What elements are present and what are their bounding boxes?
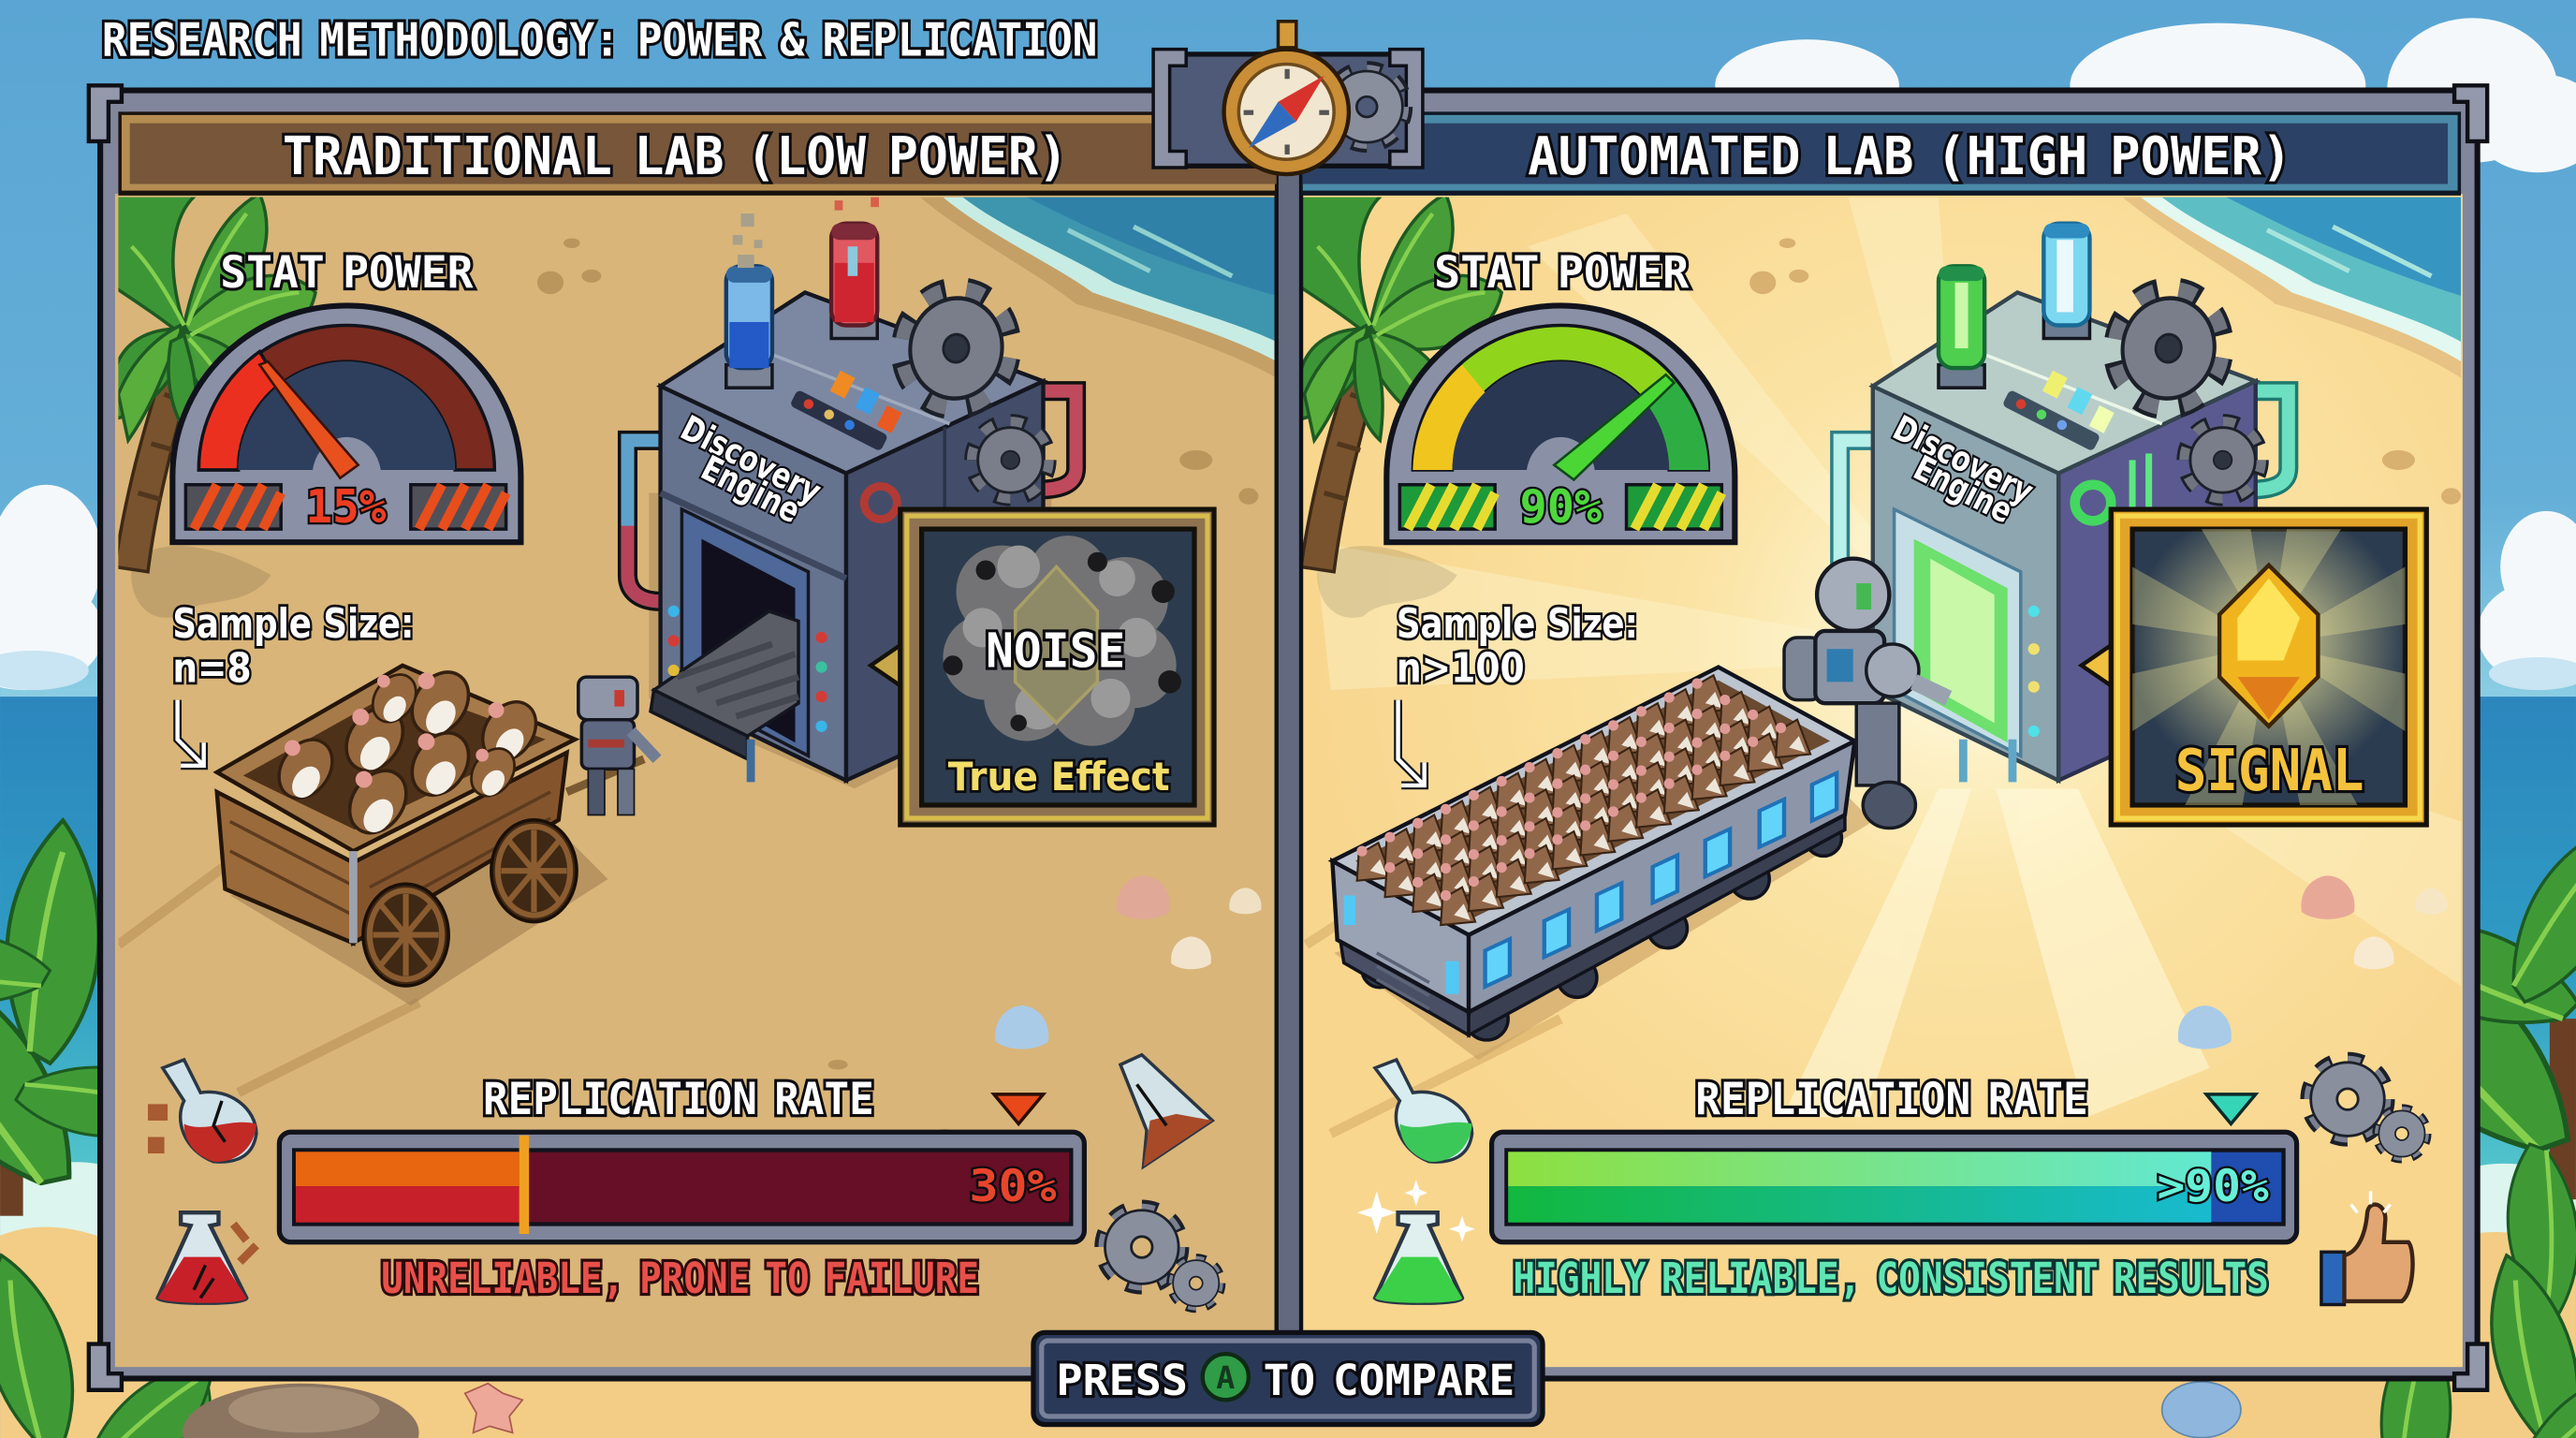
icon: A button xyxy=(1203,1354,1249,1400)
header bar: automated lab xyxy=(1301,111,2461,196)
sample size: automated: n>100 xyxy=(1397,644,1525,692)
icon: gears xyxy=(1107,1213,1218,1304)
rays and gem xyxy=(2132,529,2405,805)
caption: HIGHLY RELIABLE, CONSISTENT RESULTS xyxy=(1513,1254,2269,1303)
sample size: automated xyxy=(1397,600,1638,785)
callout: noise: NOISE xyxy=(986,624,1125,680)
press to compare button: TO COMPARE xyxy=(1264,1356,1515,1405)
cart with rats xyxy=(217,661,577,986)
label: REPLICATION RATE xyxy=(1695,1074,2088,1125)
sand tracks and marks xyxy=(118,838,419,1093)
arrow xyxy=(178,700,204,766)
arrow xyxy=(1398,700,1425,785)
shadow under cart xyxy=(230,843,608,1005)
tubes xyxy=(726,266,772,388)
icon: red erlenmeyer flask xyxy=(158,1212,256,1303)
steam xyxy=(733,213,762,268)
shells xyxy=(995,875,1261,1049)
progress bar xyxy=(1492,1132,2297,1242)
bottom rocks and shells xyxy=(183,1382,2241,1438)
icon: cracked conical flask xyxy=(1120,1055,1212,1167)
callout: noise xyxy=(871,509,1214,825)
lights xyxy=(2028,453,2152,737)
callout: noise: True Effect xyxy=(948,754,1170,800)
sand marks xyxy=(1306,855,1560,1134)
replication rate: traditional xyxy=(279,1074,1084,1303)
machine: discovery engine xyxy=(627,198,1076,788)
sample size: automated: Sample Size: xyxy=(1397,600,1638,648)
label: REPLICATION RATE xyxy=(483,1074,874,1125)
icon: gear xyxy=(1334,74,1400,139)
robot operator xyxy=(1784,559,1949,829)
label: STAT POWER xyxy=(1434,247,1690,299)
header bar: traditional lab xyxy=(118,111,1277,196)
wheels xyxy=(363,820,577,986)
palm tree xyxy=(115,194,315,618)
title: RESEARCH METHODOLOGY: POWER & REPLICATION xyxy=(102,13,1097,67)
palm tree xyxy=(1301,194,1501,618)
pipes xyxy=(627,440,661,601)
icon: compass xyxy=(1224,22,1349,174)
sample size: traditional: n=8 xyxy=(172,644,252,692)
label: STAT POWER xyxy=(220,247,474,299)
caption: UNRELIABLE, PRONE TO FAILURE xyxy=(381,1254,979,1303)
sample size: traditional: Sample Size: xyxy=(172,600,414,648)
shadow under wagon xyxy=(1334,788,1873,1060)
door with glow xyxy=(1895,509,2021,756)
progress bar xyxy=(279,1132,1084,1242)
gears xyxy=(2109,285,2229,412)
heading: TRADITIONAL LAB (LOW POWER) xyxy=(283,126,1068,187)
sample size: traditional xyxy=(172,600,414,766)
wheels xyxy=(1362,820,1841,1040)
icon: green erlenmeyer flask xyxy=(1357,1180,1475,1303)
progress bar: 30% xyxy=(970,1161,1057,1212)
stat power gauge: traditional xyxy=(172,247,520,542)
heading: AUTOMATED LAB (HIGH POWER) xyxy=(1528,126,2291,187)
warning stripes xyxy=(185,485,506,529)
engine label: Engine xyxy=(695,448,807,531)
marker xyxy=(994,1094,1044,1123)
marker xyxy=(2206,1094,2256,1123)
door and conveyor xyxy=(681,509,809,756)
warning stripes xyxy=(1399,485,1721,529)
replication rate: automated xyxy=(1492,1074,2297,1303)
gauge body xyxy=(172,305,520,542)
icon: gears xyxy=(2313,1065,2423,1155)
press to compare button: PRESS xyxy=(1057,1356,1188,1405)
icon: A button: A xyxy=(1216,1359,1235,1396)
engine label: Discovery xyxy=(675,407,827,512)
progress bar: >90% xyxy=(2157,1161,2269,1212)
rat rows xyxy=(1356,675,1727,881)
center compass plate xyxy=(1153,22,1423,174)
callout: signal xyxy=(2082,509,2426,825)
glow and rays xyxy=(1301,198,2461,1367)
indicator lights xyxy=(667,486,897,732)
icon: broken round flask xyxy=(148,1060,256,1162)
wagon windows xyxy=(1486,773,1837,987)
value: 15% xyxy=(305,479,387,534)
small robot pulling cart xyxy=(567,677,657,814)
engine label: Engine xyxy=(1908,448,2019,531)
stat power gauge: automated xyxy=(1386,247,1734,542)
center divider xyxy=(1277,165,1301,1364)
engine label: Discovery xyxy=(1887,407,2040,512)
gears xyxy=(897,285,1016,412)
clouds xyxy=(0,18,2576,690)
tubes xyxy=(1939,266,1984,388)
icon: thumbs up xyxy=(2321,1191,2413,1304)
gauge body xyxy=(1386,305,1734,542)
smoke and hidden gem xyxy=(943,536,1181,746)
panel: traditional lab xyxy=(115,194,1277,1138)
shells xyxy=(2178,875,2448,1049)
panel: automated lab xyxy=(1301,194,2461,1367)
sea corner xyxy=(2123,198,2461,378)
sea corner xyxy=(920,198,1277,378)
control panel xyxy=(791,371,902,450)
automated wagon with rats xyxy=(1332,668,1854,1040)
callout: signal: SIGNAL xyxy=(2175,738,2364,804)
machine: discovery engine xyxy=(1840,224,2289,782)
icon: green round flask xyxy=(1375,1060,1472,1162)
background palms and foliage xyxy=(0,817,2576,1438)
press to compare button xyxy=(1033,1332,1543,1425)
value: 90% xyxy=(1519,479,1603,534)
body faces xyxy=(846,381,1044,781)
